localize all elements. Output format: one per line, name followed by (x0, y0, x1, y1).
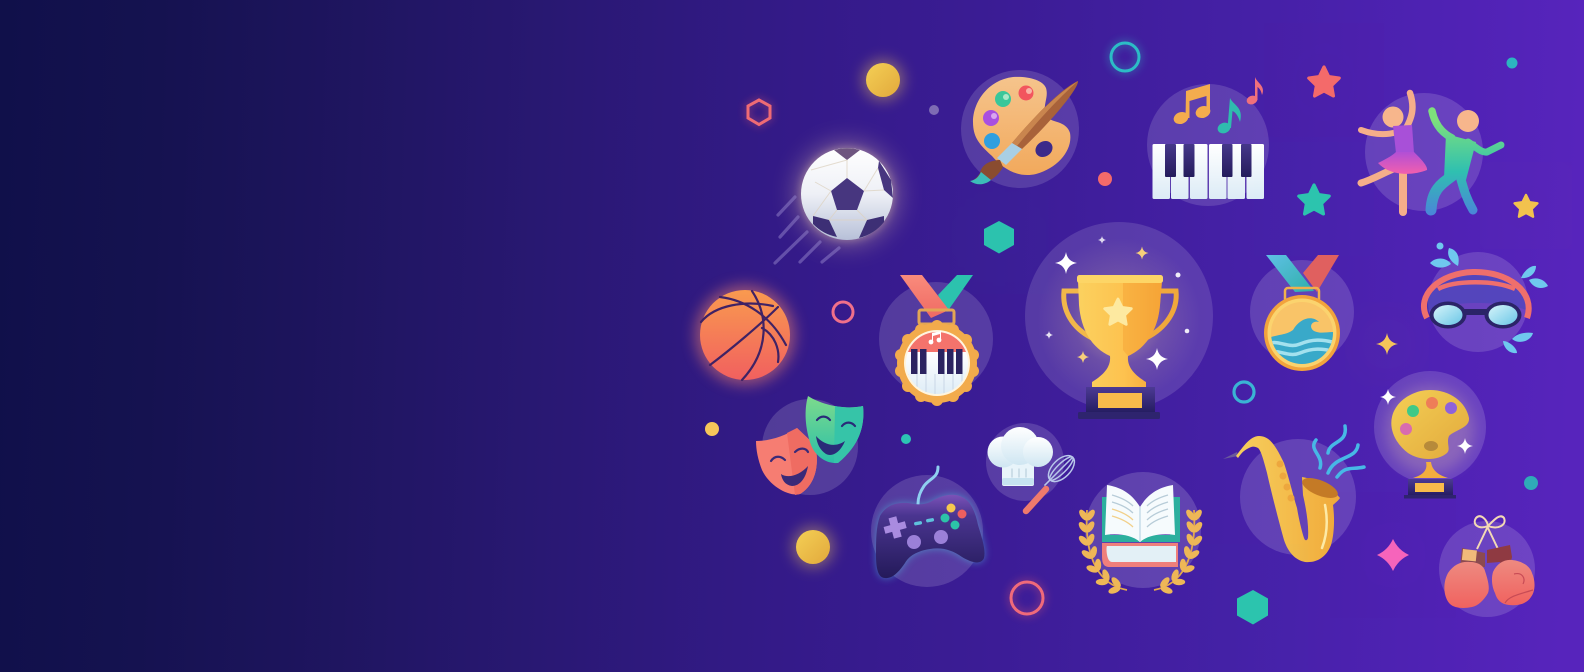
teal note (1216, 98, 1241, 135)
icon: swim goggles (1424, 242, 1548, 353)
icon: swim medal (1250, 255, 1354, 371)
icon: basketball (695, 285, 795, 385)
icon: two dancers (1361, 93, 1501, 212)
girl dancer (1361, 93, 1412, 212)
coral ring bottom (1011, 582, 1043, 614)
open book (1102, 497, 1180, 542)
yellow dot (705, 422, 719, 436)
teal hexagon (983, 218, 1015, 256)
pink sparkle (1372, 534, 1414, 576)
pink note (1245, 77, 1263, 106)
coral star (1304, 61, 1344, 99)
icon: saxophone (1223, 426, 1364, 562)
motion streaks (775, 197, 839, 263)
icon: piano keys with music notes (1147, 77, 1269, 206)
icon: soccer ball (775, 142, 899, 263)
icon: open book with laurel (1077, 472, 1204, 595)
red mask (756, 428, 817, 495)
green mask (806, 396, 863, 463)
small grey dot (929, 105, 939, 115)
gold star small (1511, 191, 1541, 220)
green hexagon bottom (1235, 586, 1271, 628)
boy dancer (1457, 110, 1479, 132)
icon: theatre masks (756, 396, 863, 495)
hexagon outline coral (748, 100, 770, 124)
coral dot (1098, 172, 1112, 186)
teal ring top (1111, 43, 1139, 71)
icon: palette trophy (1374, 371, 1486, 498)
teal star (1294, 180, 1334, 218)
orange notes (1172, 84, 1212, 126)
icon: gold trophy (1025, 222, 1213, 419)
trophy sparkles (1045, 236, 1189, 370)
teal dot centre (901, 434, 911, 444)
coral ring small (833, 302, 853, 322)
icon: game controller (871, 467, 985, 587)
icon: chef hat and whisk (986, 423, 1079, 511)
icon: piano medal (879, 275, 993, 406)
icon: painter palette and brush (961, 70, 1079, 188)
teal dot top right (1506, 58, 1518, 68)
black keys (1165, 144, 1252, 177)
illustration: activities icon cluster (686, 36, 1548, 624)
sound waves (1314, 426, 1364, 477)
blue ring small (1234, 382, 1254, 402)
gold ball top (862, 59, 904, 101)
book stack (1102, 543, 1178, 567)
water droplets (1430, 242, 1548, 353)
laurel right (1154, 508, 1204, 595)
laurel left (1077, 508, 1127, 595)
gold ball bottom (792, 526, 834, 568)
gold sparkle (1373, 330, 1401, 358)
teal dot right (1524, 476, 1538, 490)
icon: boxing gloves (1439, 516, 1535, 617)
medal scalloped rim (895, 320, 979, 406)
white keys (1152, 144, 1264, 199)
